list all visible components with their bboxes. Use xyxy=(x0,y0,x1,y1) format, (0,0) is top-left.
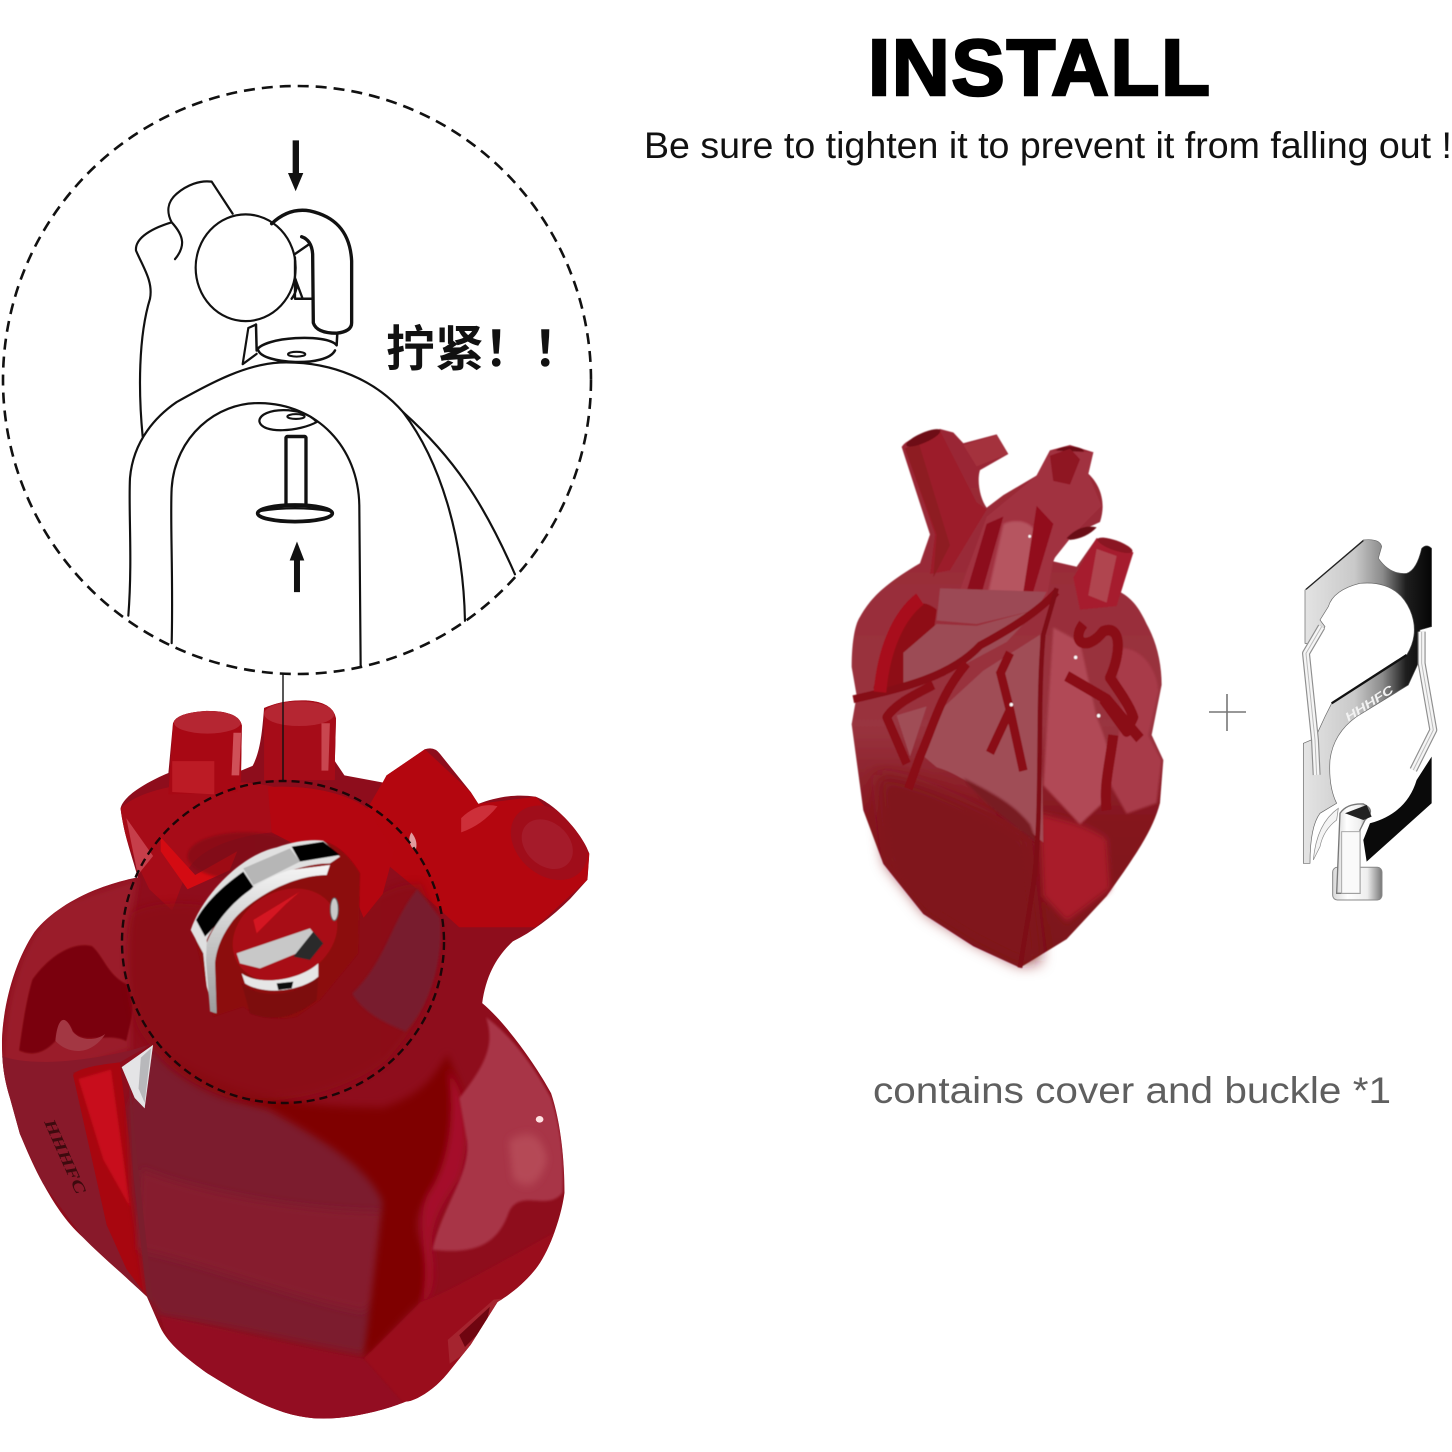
subtitle: Be sure to tighten it to prevent it from falling out ! xyxy=(644,125,1452,166)
ring opening xyxy=(216,870,354,1000)
lower dark area xyxy=(877,774,1040,962)
left dark chamber xyxy=(873,603,937,688)
large dashed callout circle xyxy=(3,86,591,674)
arrow down xyxy=(288,140,303,191)
slot xyxy=(73,1062,147,1297)
lower right red patch xyxy=(1040,814,1110,921)
metal eyelet ring xyxy=(191,840,360,1019)
right vessel xyxy=(1073,538,1133,610)
left gate wire xyxy=(1306,627,1322,775)
inner arch xyxy=(171,403,361,666)
left lobe lighter tint xyxy=(2,877,138,1076)
heart back outline xyxy=(136,181,233,437)
collar hole shadow xyxy=(187,832,290,878)
small dashed detail circle xyxy=(122,781,444,1103)
band lower edge xyxy=(206,865,330,1013)
central face xyxy=(920,635,1043,842)
round vessel xyxy=(196,214,296,321)
white glints xyxy=(1010,535,1100,717)
tube right end cap xyxy=(510,806,588,880)
right lobe xyxy=(1107,648,1162,814)
engraved brand: HHHFC xyxy=(1342,682,1396,724)
left vessel band xyxy=(905,431,987,574)
top cylinders xyxy=(168,711,242,794)
swivel bottom barrel xyxy=(1333,867,1382,900)
shoulder outer curve xyxy=(128,362,515,616)
left vein bright xyxy=(880,599,920,692)
mauve triangle between branches xyxy=(897,706,927,757)
hook base disc xyxy=(256,325,337,350)
chamber mauve xyxy=(903,610,1037,685)
slot right edge crisp xyxy=(129,1085,149,1298)
small anatomical heart photo xyxy=(852,426,1163,968)
engraved logo: HHHFC xyxy=(40,1115,89,1197)
bottom rim xyxy=(161,1316,406,1425)
specular glints on right shoulder xyxy=(536,1116,543,1123)
stem xyxy=(242,977,318,1018)
S-shaped plate xyxy=(1303,540,1432,863)
metal band xyxy=(191,840,340,1013)
vessel caps xyxy=(905,426,942,450)
lower left inner curve xyxy=(1313,808,1338,860)
contents caption: contains cover and buckle *1 xyxy=(873,1070,1391,1111)
artery branches xyxy=(887,653,1023,789)
band black segment left xyxy=(196,872,253,937)
swivel loop xyxy=(1337,804,1370,893)
band black segment right xyxy=(292,842,340,862)
line drawing: tightening diagram xyxy=(128,140,515,666)
heart base fill xyxy=(0,690,612,1430)
crimson between band and highlight xyxy=(421,1070,467,1307)
center dark band xyxy=(198,1057,462,1356)
right side highlight xyxy=(432,1017,563,1251)
right gate wire xyxy=(1413,632,1433,770)
hook bracket xyxy=(272,210,352,333)
connector line xyxy=(282,673,284,782)
right inner seam xyxy=(403,412,465,621)
upper collar band xyxy=(937,588,1047,624)
right face xyxy=(1043,628,1111,825)
left collar tint xyxy=(121,782,276,911)
lower right plate xyxy=(1363,757,1432,862)
main mauve panel xyxy=(128,1043,390,1354)
band gray segment xyxy=(243,848,300,885)
ring pool dark tint around ring xyxy=(127,884,440,1101)
inner lens xyxy=(237,928,317,968)
ring shadow base xyxy=(193,840,360,1019)
side glint xyxy=(330,898,338,921)
bolt xyxy=(286,437,306,505)
arrow up xyxy=(290,542,304,592)
lower lip xyxy=(242,963,318,991)
top edge highlight xyxy=(1306,541,1363,589)
upper vessels bright tint xyxy=(268,749,589,927)
small opening at bottom right xyxy=(448,1298,503,1364)
notch white triangle xyxy=(122,1045,153,1108)
right lower rim xyxy=(365,1231,555,1404)
red vessel wedge xyxy=(268,787,394,918)
plus sign xyxy=(1209,694,1246,731)
large red heart product photo xyxy=(0,690,612,1430)
aorta xyxy=(957,450,1102,613)
right mauve area inside circle xyxy=(352,889,441,1032)
tighten label: 拧紧！！ xyxy=(386,323,582,377)
hole disc xyxy=(259,410,317,430)
carabiner buckle xyxy=(1303,540,1433,900)
right-side vein cluster xyxy=(1067,624,1140,810)
left lower strip tint xyxy=(0,1043,153,1297)
title: INSTALL xyxy=(868,23,1210,112)
heart silhouette xyxy=(852,429,1163,968)
main artery xyxy=(853,592,1057,699)
left lobe dark patch xyxy=(19,945,132,1053)
